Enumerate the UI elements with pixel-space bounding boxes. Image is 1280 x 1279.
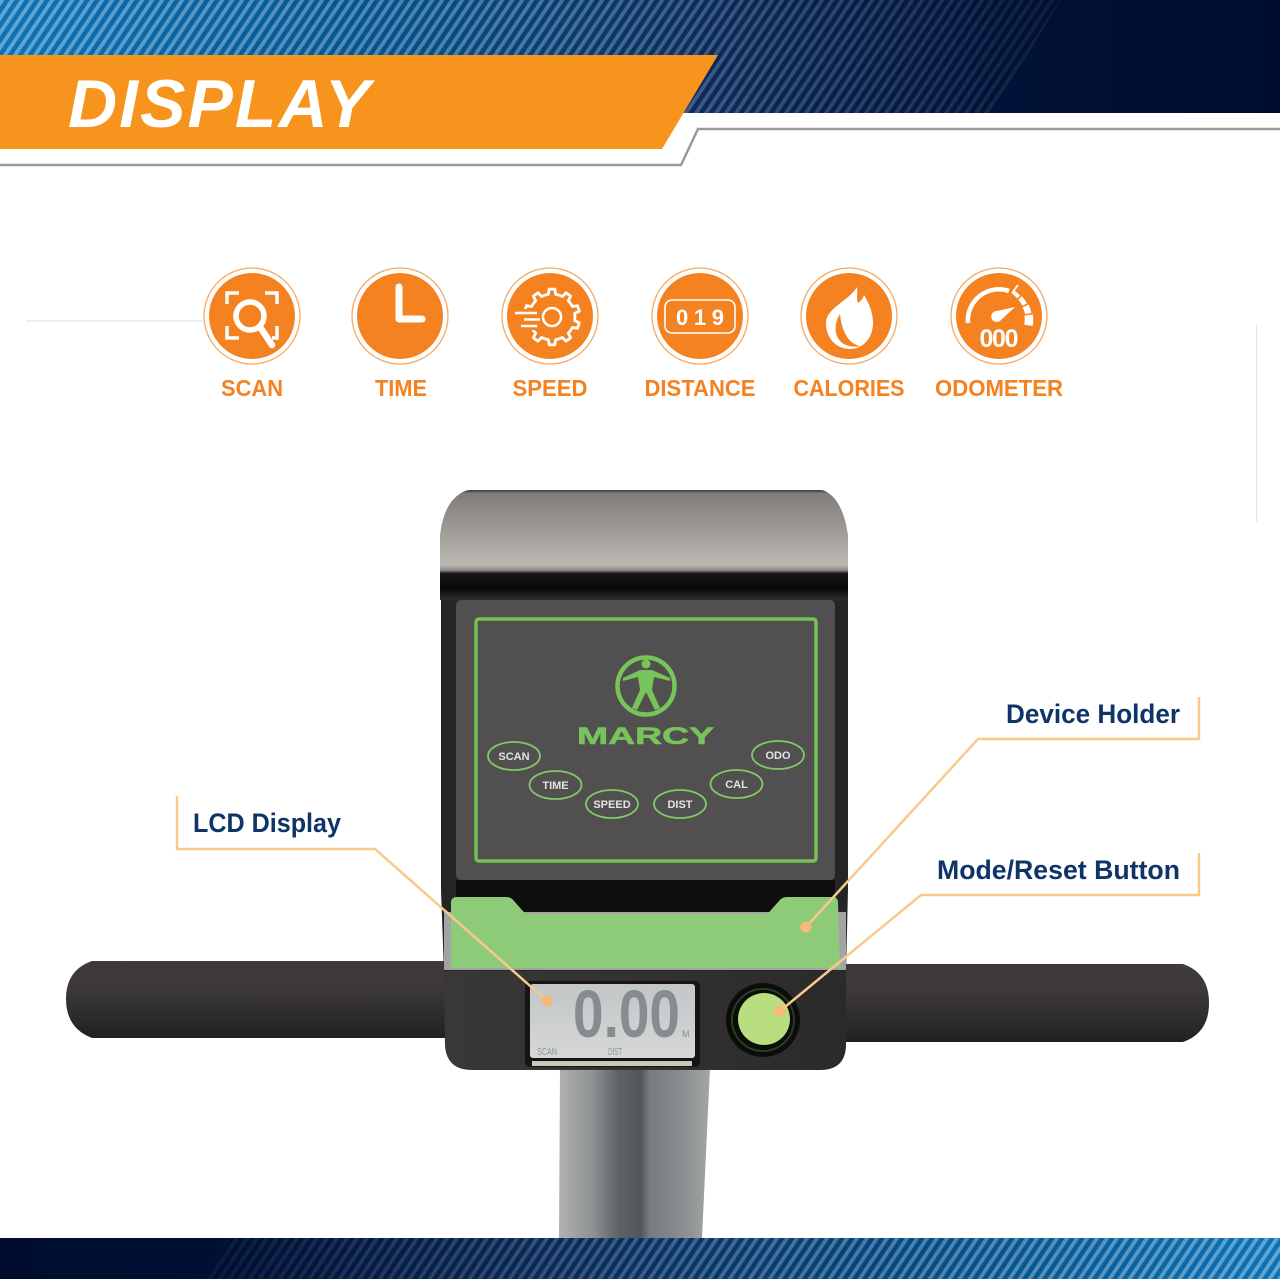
footer band bbox=[0, 1238, 1280, 1279]
icon: odometer: 000 bbox=[980, 325, 1018, 353]
lcd display: M bbox=[682, 1029, 690, 1039]
device holder hood bbox=[440, 490, 848, 600]
support post bbox=[559, 1068, 710, 1238]
right handlebar bbox=[844, 964, 1209, 1042]
icon: speed bbox=[502, 268, 598, 401]
title: DISPLAY bbox=[68, 66, 376, 142]
lcd display: 0.00 bbox=[573, 977, 680, 1052]
speed button: SPEED bbox=[593, 799, 631, 811]
icon: distance: 019 bbox=[676, 305, 724, 330]
time button: TIME bbox=[542, 780, 569, 792]
dist button bbox=[654, 790, 706, 818]
dist button: DIST bbox=[667, 799, 693, 811]
cal button: CAL bbox=[725, 779, 748, 791]
feature icons row bbox=[204, 268, 1063, 401]
icon: scan: SCAN bbox=[221, 375, 283, 401]
callout: mode reset button: Mode/Reset Button bbox=[937, 855, 1180, 885]
icon: odometer bbox=[935, 268, 1063, 401]
icon: scan bbox=[204, 268, 300, 401]
time button bbox=[530, 771, 582, 799]
cal button bbox=[710, 770, 762, 798]
speed button bbox=[586, 790, 638, 818]
lcd display: DIST bbox=[608, 1047, 622, 1058]
scan button bbox=[488, 742, 540, 770]
icon: calories bbox=[794, 268, 904, 401]
console body bbox=[441, 595, 848, 972]
callout: device holder bbox=[800, 697, 1199, 932]
icon: speed: SPEED bbox=[512, 375, 588, 401]
icon: time: TIME bbox=[375, 375, 427, 401]
header outline stroke bbox=[0, 129, 1280, 165]
icon: marcy logo: MARCY bbox=[577, 723, 714, 750]
callout: lcd display bbox=[177, 796, 552, 1006]
lcd display: SCAN bbox=[537, 1047, 557, 1058]
callout: device holder: Device Holder bbox=[1006, 699, 1180, 729]
exercise bike console bbox=[66, 490, 1209, 1238]
icon: marcy logo bbox=[577, 658, 714, 750]
header band bbox=[0, 0, 1280, 113]
odo button: ODO bbox=[765, 750, 791, 762]
panel green frame bbox=[476, 619, 816, 861]
callout: mode reset button bbox=[774, 853, 1199, 1016]
icon: distance bbox=[644, 268, 756, 401]
mode reset button bbox=[726, 983, 800, 1057]
panel bbox=[456, 600, 835, 880]
lower housing bbox=[444, 971, 846, 1070]
icon: time bbox=[352, 268, 448, 401]
lcd display bbox=[525, 977, 700, 1067]
left handlebar bbox=[66, 961, 446, 1038]
scan button: SCAN bbox=[498, 751, 530, 763]
icon: distance: DISTANCE bbox=[644, 375, 756, 401]
slot bbox=[456, 880, 835, 912]
icon: odometer: ODOMETER bbox=[935, 375, 1063, 401]
callout: lcd display: LCD Display bbox=[193, 808, 341, 838]
odo button bbox=[752, 741, 804, 769]
green device holder bbox=[451, 897, 840, 968]
icon: calories: CALORIES bbox=[794, 375, 904, 401]
title banner bbox=[0, 55, 718, 149]
